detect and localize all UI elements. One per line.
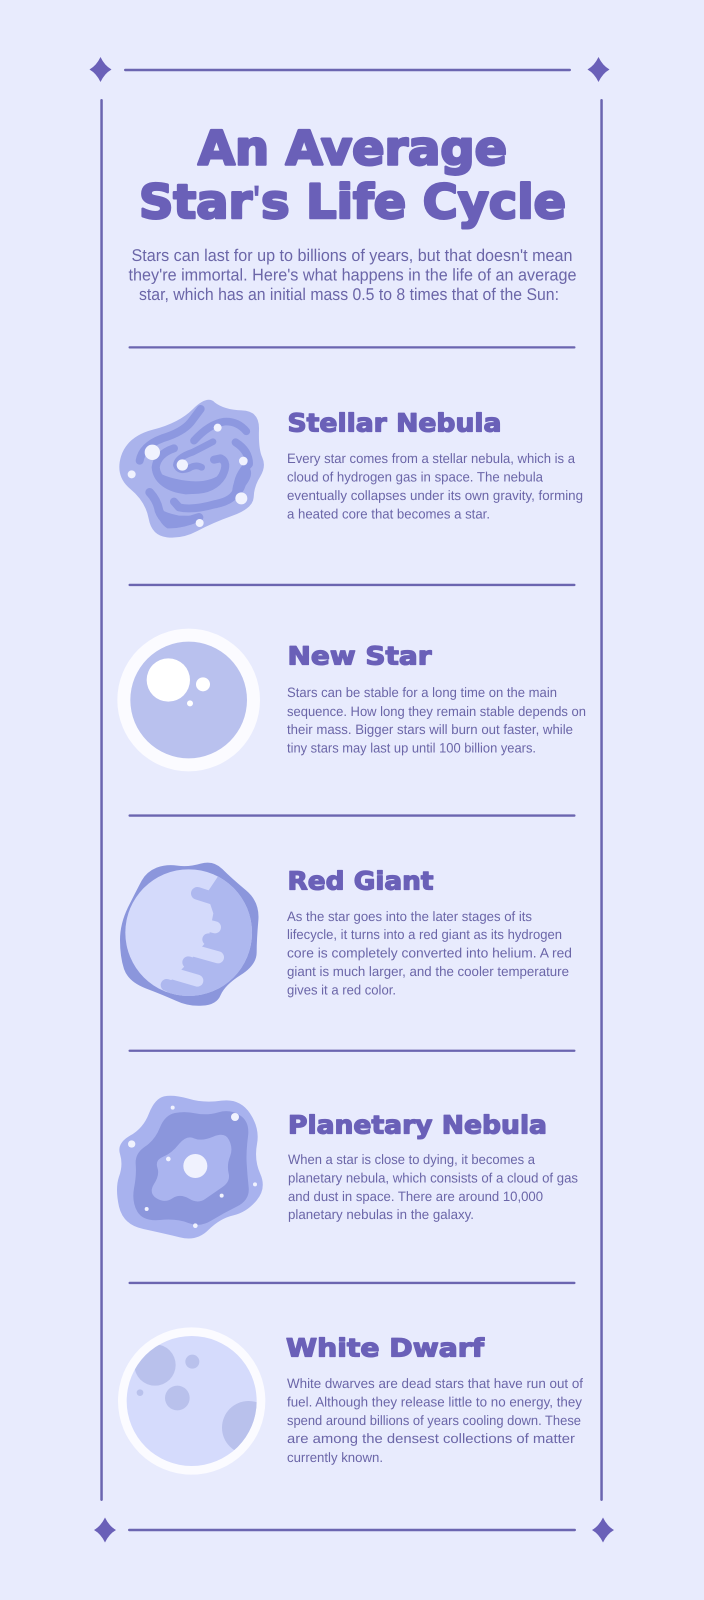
text: planetary nebula: When a star is close to dying, it becomes a bbox=[288, 1152, 535, 1167]
icon: sparkle top right bbox=[588, 57, 610, 82]
icon: planetary nebula bbox=[117, 1096, 263, 1239]
text: red giant: As the star goes into the later stages of its bbox=[287, 909, 532, 924]
text: new star: Stars can be stable for a long time on the main bbox=[287, 685, 557, 700]
title bbox=[139, 122, 566, 230]
text: new star bbox=[287, 685, 586, 756]
text: new star: tiny stars may last up until 100 billion years. bbox=[287, 740, 536, 756]
text: planetary nebula: planetary nebulas in the galaxy. bbox=[288, 1207, 474, 1222]
heading: stellar nebula: Stellar Nebula bbox=[288, 408, 502, 438]
icon: red giant bbox=[120, 863, 267, 1006]
heading: white dwarf: White Dwarf bbox=[286, 1334, 485, 1362]
frame with corner sparkles bbox=[90, 57, 614, 1542]
icon: sparkle top left bbox=[90, 57, 112, 82]
intro text bbox=[128, 246, 576, 304]
heading: new star: New Star bbox=[288, 642, 432, 670]
title: Star's Life Cycle bbox=[139, 175, 566, 230]
intro text: they're immortal. Here's what happens in the life of an average bbox=[128, 266, 576, 284]
heading: planetary nebula: Planetary Nebula bbox=[288, 1110, 547, 1140]
intro text: Stars can last for up to billions of years, but that doesn't mean bbox=[132, 246, 572, 265]
heading: red giant: Red Giant bbox=[288, 866, 434, 896]
text: red giant: gives it a red color. bbox=[287, 982, 396, 998]
text: white dwarf: White dwarves are dead stars that have run out of bbox=[287, 1376, 583, 1391]
text: planetary nebula: and dust in space. There are around 10,000 bbox=[288, 1189, 543, 1204]
text: white dwarf: currently known. bbox=[287, 1450, 383, 1465]
icon: sparkle bottom left bbox=[94, 1518, 116, 1542]
left frame line bbox=[100, 99, 103, 1501]
intro text: star, which has an initial mass 0.5 to 8 times that of the Sun: bbox=[139, 285, 559, 304]
text: stellar nebula: cloud of hydrogen gas in space. The nebula bbox=[287, 470, 543, 484]
infographic canvas bbox=[90, 57, 614, 1542]
icon: sparkle bottom right bbox=[592, 1518, 614, 1542]
text: white dwarf bbox=[287, 1376, 583, 1465]
top frame line bbox=[124, 69, 571, 71]
text: white dwarf: spend around billions of years cooling down. These bbox=[287, 1413, 581, 1428]
text: new star: their mass. Bigger stars will burn out faster, while bbox=[287, 722, 573, 737]
right frame line bbox=[600, 99, 603, 1501]
icon: stellar nebula bbox=[119, 400, 264, 538]
section dividers bbox=[128, 346, 576, 1284]
icon: new star bbox=[117, 629, 260, 771]
bottom frame line bbox=[128, 1529, 576, 1531]
text: white dwarf: are among the densest collections of matter bbox=[287, 1431, 576, 1446]
text: planetary nebula: planetary nebula, which consists of a cloud of gas bbox=[288, 1170, 578, 1186]
icon: white dwarf bbox=[118, 1327, 275, 1475]
text: stellar nebula: eventually collapses under its own gravity, forming bbox=[287, 488, 583, 503]
text: red giant: giant is much larger, and the cooler temperature bbox=[287, 964, 569, 979]
text: stellar nebula bbox=[287, 451, 583, 522]
text: planetary nebula bbox=[288, 1152, 578, 1222]
text: stellar nebula: a heated core that becomes a star. bbox=[287, 506, 490, 522]
text: red giant: core is completely converted into helium. A red bbox=[287, 946, 572, 960]
text: red giant bbox=[287, 909, 572, 998]
text: white dwarf: fuel. Although they release little to no energy, they bbox=[287, 1394, 582, 1410]
text: stellar nebula: Every star comes from a stellar nebula, which is a bbox=[287, 451, 575, 466]
text: red giant: lifecycle, it turns into a red giant as its hydrogen bbox=[287, 927, 562, 942]
title: An Average bbox=[198, 122, 507, 176]
text: new star: sequence. How long they remain stable depends on bbox=[287, 704, 586, 719]
